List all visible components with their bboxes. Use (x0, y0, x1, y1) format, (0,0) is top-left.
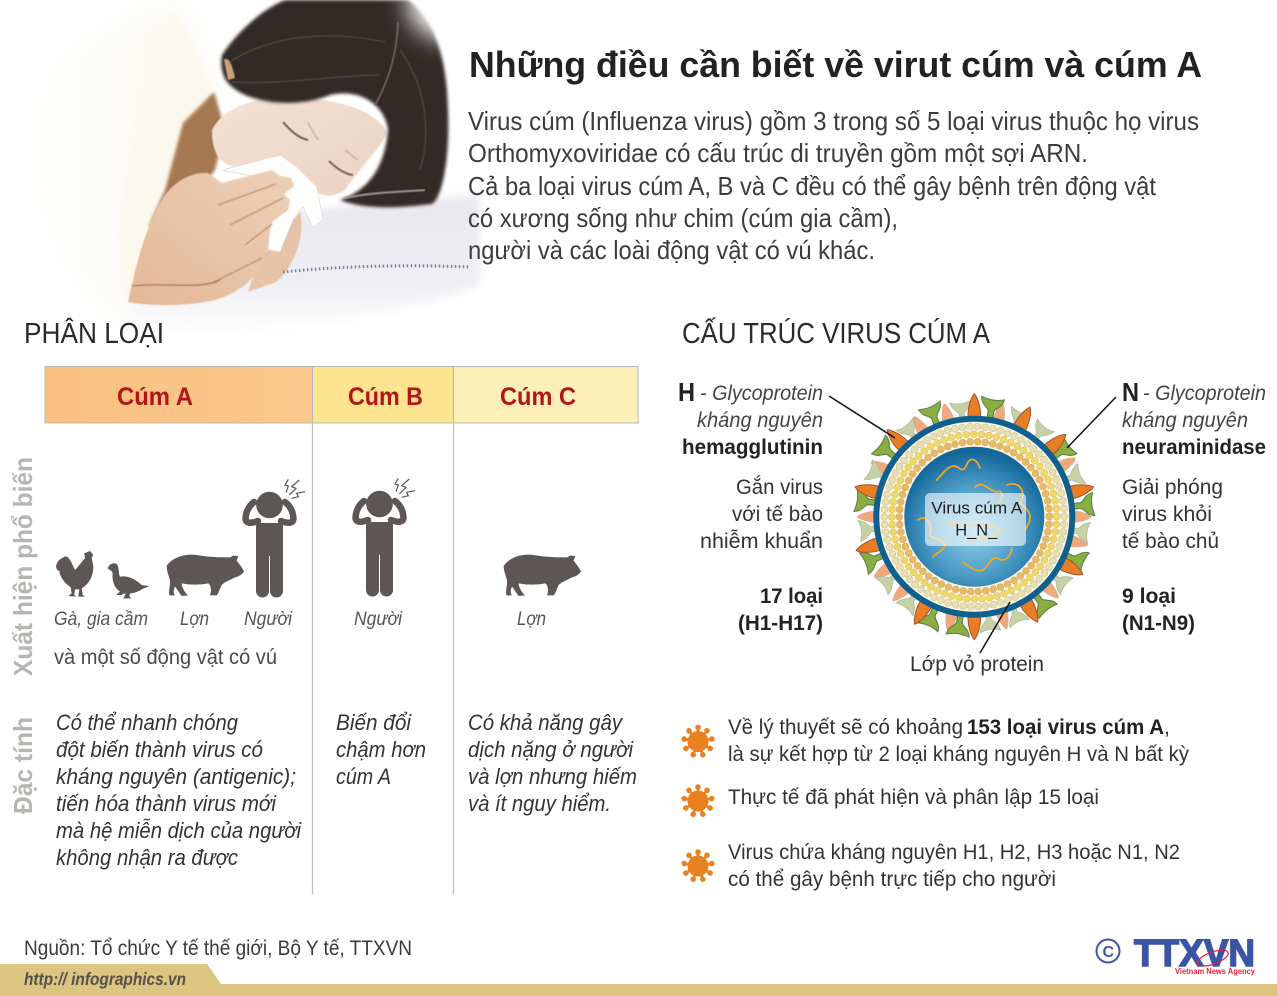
logo: TTXVN: C (1102, 944, 1114, 961)
label box: virus cúm A H_N_ (925, 493, 1026, 546)
label: lợn: Lợn (180, 609, 209, 630)
RNA strands (918, 460, 1030, 571)
intro text block: có xương sống như chim (cúm gia cầm), (468, 203, 898, 233)
table header: cúm B (312, 366, 454, 423)
intro text block: người và các loài động vật có vú khác. (468, 235, 875, 265)
footer band (0, 964, 1277, 996)
arrow: pointer to N spike (1067, 397, 1116, 448)
intro text block: Cả ba loại virus cúm A, B và C đều có thể gây bệnh trên động vật (468, 171, 1157, 201)
icon: person, cúm B (356, 478, 415, 596)
fact: antigens infecting humans (728, 840, 1180, 891)
icon: bullet virus 1 (681, 725, 715, 758)
text: cúm B characteristics: chậm hơn (336, 737, 426, 762)
footer url: http:// infographics.vn (24, 969, 186, 989)
text: cúm A characteristics (56, 710, 302, 870)
arrow: pointer to H spike (829, 396, 895, 438)
label: người, cúm B: Người (354, 609, 403, 630)
text: cúm A characteristics: đột biến thành virus có (56, 737, 263, 762)
text block: N glycoprotein: (N1-N9) (1122, 611, 1195, 635)
text: cúm A characteristics: tiến hóa thành virus mới (56, 791, 277, 816)
panel: classification table (8, 366, 638, 894)
text block: N glycoprotein: neuraminidase (1122, 435, 1266, 459)
text: cúm C characteristics: Có khả năng gây (468, 710, 624, 735)
icon: bullet virus 2 (681, 784, 715, 818)
label: người: Người (244, 609, 293, 630)
virus core (904, 447, 1044, 587)
text block: N glycoprotein: virus khỏi (1122, 502, 1212, 526)
text: cúm A characteristics: mà hệ miễn dịch của người (56, 818, 302, 843)
text block: H glycoprotein: kháng nguyên (697, 409, 823, 432)
icon: pig, cúm C (504, 555, 581, 596)
icon: bullet virus 3 (681, 849, 715, 883)
photo: woman sneezing into tissue (30, 0, 492, 336)
source note: Nguồn: Tổ chức Y tế thế giới, Bộ Y tế, TTXVN (24, 937, 412, 960)
text block: N glycoprotein: N (1122, 377, 1139, 407)
icon: duck (108, 563, 149, 598)
fact: antigens infecting humans: Virus chứa kháng nguyên H1, H2, H3 hoặc N1, N2 (728, 840, 1180, 864)
text block: N glycoprotein: 9 loại (1122, 584, 1176, 608)
text block: N glycoprotein: tế bào chủ (1122, 529, 1219, 553)
heading: phân loại: PHÂN LOẠI (24, 317, 164, 350)
row label: đặc tính: Đặc tính (8, 717, 38, 814)
icon: rooster (56, 551, 93, 597)
intro text block (468, 106, 1199, 265)
orange spikes (853, 394, 1095, 640)
text block: N glycoprotein: Giải phóng (1122, 475, 1223, 499)
text: cúm B characteristics: Biến đổi (336, 710, 412, 735)
text: cúm B characteristics (336, 710, 426, 789)
text block: H glycoprotein: (H1-H17) (738, 611, 823, 635)
table header: cúm B: Cúm B (348, 383, 423, 411)
fact: 153 virus types (728, 715, 1189, 766)
title: Những điều cần biết về virut cúm và cúm A (469, 44, 1202, 85)
logo: TTXVN: TTXVN (1134, 933, 1255, 975)
text: cúm A characteristics: Có thể nhanh chóng (56, 710, 239, 735)
text: cúm C characteristics (468, 710, 637, 816)
icon: pig, cúm A (167, 555, 244, 596)
intro text block: Orthomyxoviridae có cấu trúc di truyền gồm một sợi ARN. (468, 138, 1088, 168)
label: lớp vỏ protein: Lớp vỏ protein (910, 652, 1044, 676)
heading: cấu trúc virus cúm A: CẤU TRÚC VIRUS CÚM A (682, 316, 991, 350)
logo: TTXVN: Vietnam News Agency (1175, 966, 1255, 976)
label: gà, gia cầm: Gà, gia cầm (54, 609, 148, 630)
row label: xuất hiện phổ biến: Xuất hiện phổ biến (8, 457, 38, 676)
fact: 153 virus types: Về lý thuyết sẽ có khoảng (728, 715, 963, 739)
text: cúm C characteristics: và ít nguy hiểm. (468, 791, 611, 816)
note: other mammals: và một số động vật có vú (54, 646, 277, 669)
icon: person, cúm A (246, 479, 305, 598)
text block: N glycoprotein (1122, 377, 1266, 635)
faded background spikes (857, 400, 1091, 633)
green spikes (854, 396, 1095, 637)
label box: virus cúm A H_N_: H_N_ (955, 521, 998, 540)
text block: H glycoprotein: 17 loại (760, 584, 823, 608)
arrow: pointer to protein shell (980, 602, 1010, 653)
text block: H glycoprotein: H (678, 377, 695, 407)
fact: 153 virus types: 153 loại virus cúm A (967, 715, 1164, 739)
intro text block: Virus cúm (Influenza virus) gồm 3 trong số 5 loại virus thuộc họ virus (468, 106, 1199, 136)
text: cúm A characteristics: kháng nguyên (antigenic); (56, 764, 296, 789)
label box: virus cúm A H_N_: Virus cúm A (931, 499, 1023, 518)
table header: cúm C (454, 366, 638, 423)
text block: H glycoprotein: Gắn virus (736, 474, 823, 499)
text: cúm C characteristics: dịch nặng ở người (468, 737, 634, 762)
text block: H glycoprotein (678, 377, 823, 635)
text block: N glycoprotein: - Glycoprotein (1143, 382, 1266, 405)
text: cúm C characteristics: và lợn nhưng hiếm (468, 764, 637, 789)
table header: cúm A (45, 366, 312, 423)
fact: antigens infecting humans: có thể gây bệnh trực tiếp cho người (728, 867, 1056, 891)
text block: H glycoprotein: - Glycoprotein (700, 382, 823, 405)
fact: 15 types isolated: Thực tế đã phát hiện và phân lập 15 loại (728, 785, 1099, 809)
text block: H glycoprotein: hemagglutinin (682, 435, 823, 459)
text: cúm A characteristics: không nhận ra được (56, 845, 238, 870)
text block: H glycoprotein: nhiễm khuẩn (700, 528, 823, 553)
text block: N glycoprotein: kháng nguyên (1122, 409, 1248, 432)
table header: cúm C: Cúm C (500, 383, 576, 411)
fact: 153 virus types: , (1164, 715, 1170, 739)
label: lợn, cúm C: Lợn (517, 609, 546, 630)
text: cúm B characteristics: cúm A (336, 764, 391, 789)
table header: cúm A: Cúm A (117, 383, 193, 411)
text block: H glycoprotein: với tế bào (732, 502, 823, 526)
fact: 153 virus types: là sự kết hợp từ 2 loại kháng nguyên H và N bất kỳ (728, 742, 1189, 766)
diagram: virus structure (853, 394, 1095, 640)
virus shell (873, 416, 1075, 618)
